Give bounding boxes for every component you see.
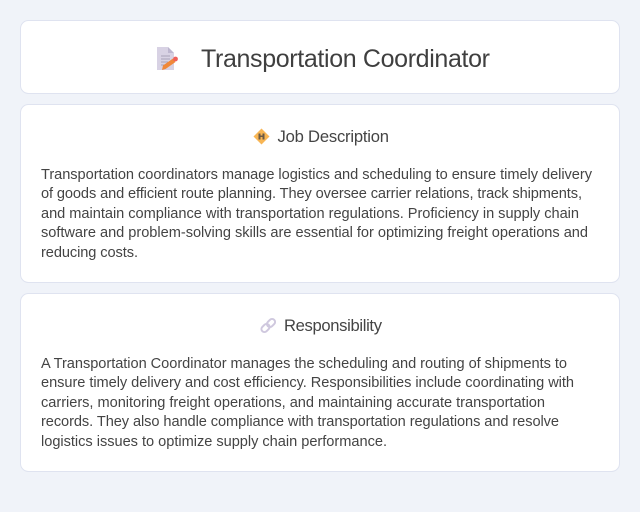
panel: title card <box>20 20 620 94</box>
text block: job description: and maintain compliance with transportation regulations. Proficiency in supply chain <box>41 206 579 222</box>
icon: road sign diamond <box>254 128 270 144</box>
text block: responsibility <box>41 356 574 450</box>
text block: job description <box>41 167 593 261</box>
text block: responsibility: logistics issues to optimize supply chain performance. <box>41 434 387 450</box>
text block: job description: reducing costs. <box>41 245 138 261</box>
text block: responsibility: ensure timely delivery and cost efficiency. Responsibilities include coordinating with <box>41 375 574 391</box>
text block: job description: software and problem-solving skills are essential for optimizing freight operations and <box>41 225 588 241</box>
text block: responsibility: carriers, monitoring freight operations, and maintaining accurate transportation <box>41 395 545 411</box>
panel: job description <box>20 104 620 282</box>
panel: responsibility <box>20 294 620 472</box>
icon: chain link <box>260 318 276 333</box>
icon: document with pencil <box>157 47 178 70</box>
text block: responsibility: A Transportation Coordinator manages the scheduling and routing of shipments to <box>41 356 567 372</box>
text block: job description: Transportation coordinators manage logistics and scheduling to ensure timely delivery <box>41 167 593 183</box>
title: Transportation Coordinator <box>201 45 490 73</box>
heading: responsibility: Responsibility <box>284 316 383 335</box>
text block: responsibility: records. They also handle compliance with transportation regulations and resolve <box>41 414 559 430</box>
heading: job description: Job Description <box>278 127 389 146</box>
text block: job description: of goods and efficient route planning. They oversee carrier relations, track shipments, <box>41 186 582 202</box>
